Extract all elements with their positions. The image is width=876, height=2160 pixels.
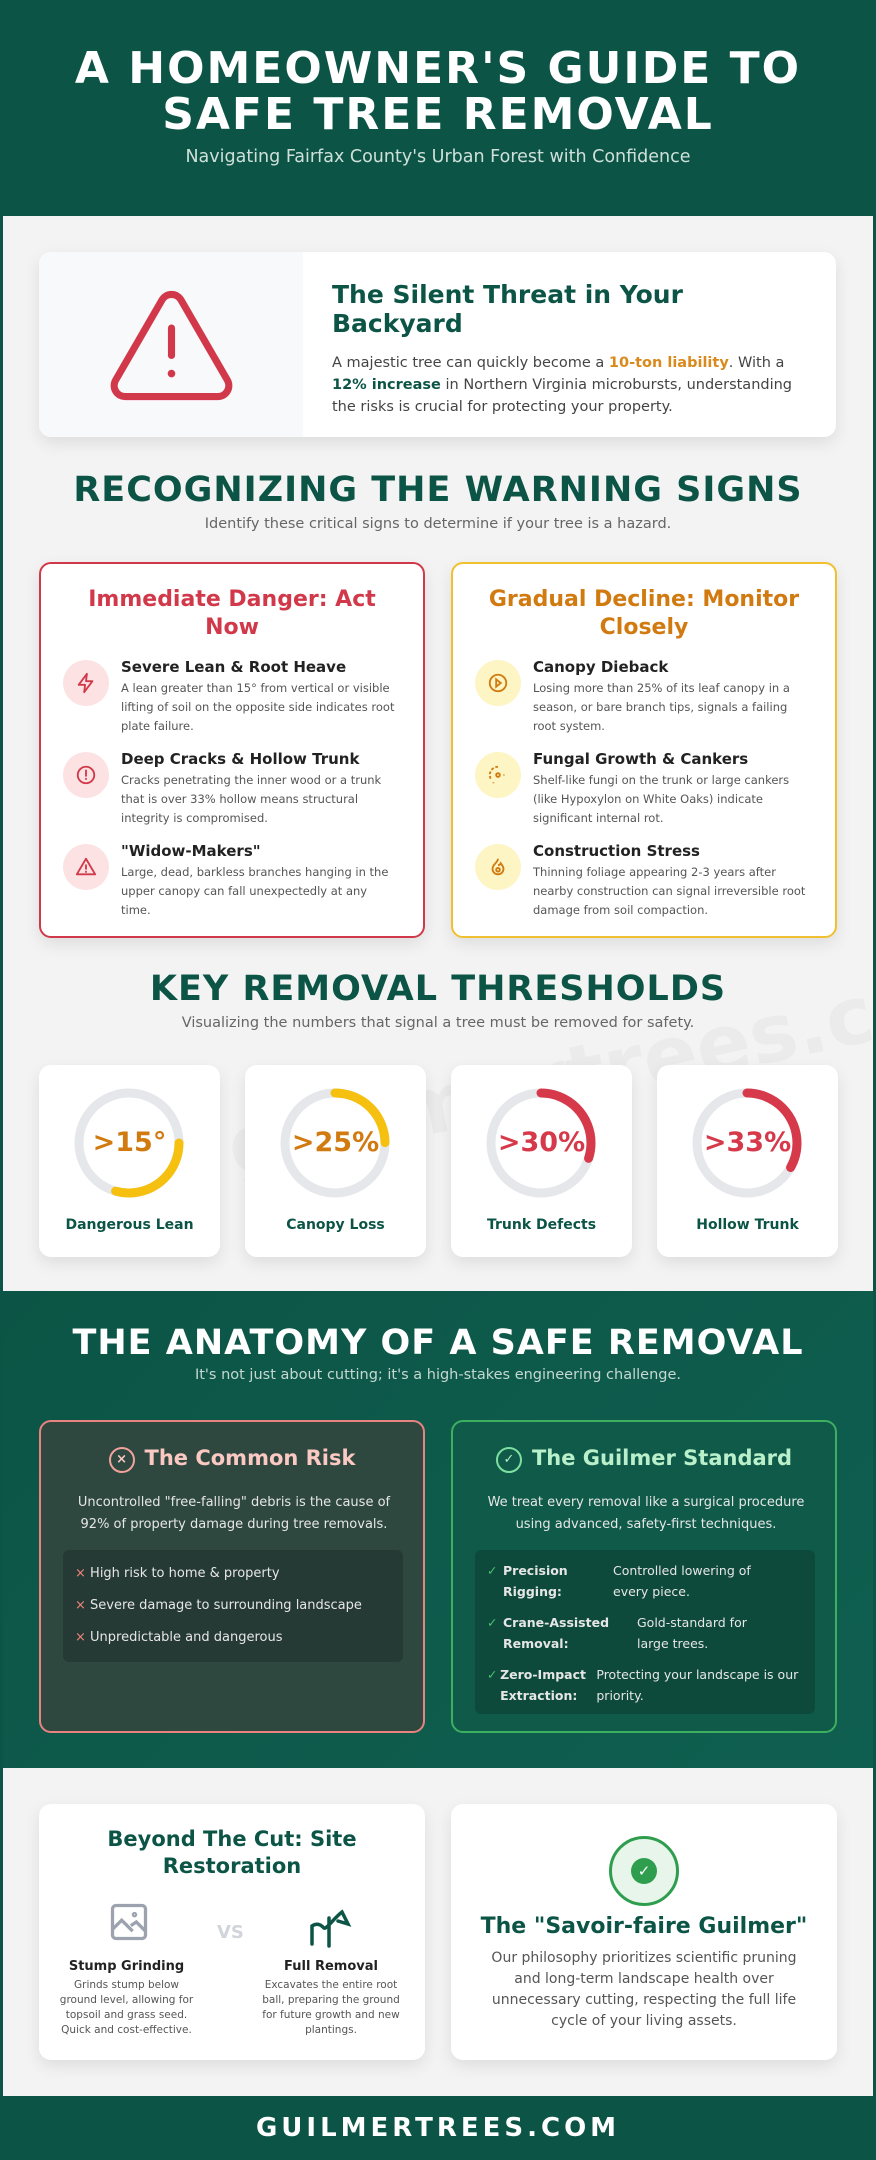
standard list	[475, 1550, 815, 1714]
gauge: hollow trunk: >33%	[704, 1127, 791, 1158]
icon: check badge: ✓	[638, 1862, 650, 1880]
standard list: ✓	[487, 1615, 497, 1630]
gauge: hollow trunk: Hollow Trunk	[696, 1217, 799, 1233]
header	[0, 0, 876, 216]
heading: thresholds: KEY REMOVAL THRESHOLDS	[150, 969, 726, 1009]
footer: GUILMERTREES.COM	[256, 2113, 620, 2143]
gauge: lean: Dangerous Lean	[65, 1217, 194, 1233]
panel: savoir-faire: The "Savoir-faire Guilmer"	[481, 1914, 807, 1939]
subheading: It's not just about cutting; it's a high-stakes engineering challenge.	[195, 1367, 681, 1383]
item: construction stress: Construction Stress	[533, 842, 700, 860]
standard list: Zero-Impact Extraction:	[500, 1667, 586, 1703]
icon: check badge	[609, 1836, 679, 1906]
panel: immediate danger	[39, 562, 425, 938]
gauge: lean: >15°	[93, 1127, 166, 1158]
panel: gradual decline: Gradual Decline: Monitor	[489, 587, 799, 612]
item: widow-makers: "Widow-Makers"	[121, 842, 261, 860]
icon: stump grinding	[110, 1904, 148, 1940]
threat text: The Silent Threat in Your Backyard	[332, 280, 683, 338]
item: deep cracks	[63, 750, 381, 825]
item: widow-makers	[63, 842, 388, 917]
panel: guilmer standard: We treat every removal like a surgical procedure using advanced, safety-first techniques.	[488, 1495, 804, 1532]
dark section: anatomy	[3, 1291, 873, 1768]
full removal text: Full Removal	[284, 1959, 378, 1974]
heading: warning signs: RECOGNIZING THE WARNING SIGNS	[73, 470, 803, 510]
item: deep cracks: Cracks penetrating the inner wood or a trunk that is over 33% hollow means structural integrity is compromised.	[121, 773, 381, 825]
panel: guilmer standard	[451, 1420, 837, 1733]
panel: silent threat	[39, 252, 836, 437]
title: A HOMEOWNER'S GUIDE TO	[75, 43, 801, 94]
standard list: Controlled lowering of every piece.	[613, 1563, 751, 1599]
threat text	[332, 280, 792, 415]
item: canopy dieback: Canopy Dieback	[533, 658, 668, 676]
panel: site restoration	[39, 1804, 425, 2060]
full removal text: Excavates the entire root ball, preparing the ground for future growth and new plantings.	[262, 1979, 400, 2036]
standard list: Precision Rigging:	[503, 1563, 568, 1599]
panel: site restoration: VS	[217, 1922, 244, 1943]
panel: site restoration: Beyond The Cut: Site	[107, 1827, 357, 1851]
item: severe lean	[63, 658, 394, 733]
gauge: trunk defects	[451, 1065, 632, 1257]
gauge: canopy: >25%	[292, 1127, 379, 1158]
standard list: Crane-Assisted Removal:	[503, 1615, 609, 1651]
footer	[0, 2096, 876, 2160]
item: severe lean: Severe Lean & Root Heave	[121, 658, 346, 676]
item: deep cracks: Deep Cracks & Hollow Trunk	[121, 750, 359, 768]
gauge: canopy: Canopy Loss	[286, 1217, 385, 1233]
light section 1	[3, 216, 873, 1291]
subheading: Identify these critical signs to determine if your tree is a hazard.	[205, 516, 671, 532]
panel: guilmer standard: The Guilmer Standard	[532, 1446, 792, 1470]
subtitle: Navigating Fairfax County's Urban Forest with Confidence	[185, 147, 691, 167]
light section 2	[3, 1768, 873, 2096]
icon: full removal	[310, 1909, 352, 1948]
gauge: trunk defects: Trunk Defects	[487, 1217, 596, 1233]
item: fungal growth	[475, 750, 789, 825]
panel: savoir-faire: Our philosophy prioritizes scientific pruning and long-term landscape health over unnecessary cutting, respecting the full life cycle of your living assets.	[491, 1950, 797, 2029]
title: SAFE TREE REMOVAL	[162, 89, 714, 140]
item: canopy dieback	[475, 658, 790, 733]
standard list: Protecting your landscape is our priority.	[596, 1667, 798, 1703]
gauge: trunk defects: >30%	[498, 1127, 585, 1158]
stump grinding text: Stump Grinding	[69, 1959, 184, 1974]
heading: THE ANATOMY OF A SAFE REMOVAL	[72, 1323, 804, 1363]
risk list	[63, 1550, 403, 1662]
risk list: × Unpredictable and dangerous	[75, 1630, 282, 1645]
icon: warning triangle	[39, 252, 303, 437]
standard list: Gold-standard for large trees.	[637, 1615, 747, 1651]
threat text: A majestic tree can quickly become a 10-ton liability. With a 12% increase in Northern Virginia microbursts, understanding the risks is crucial for protecting your property.	[332, 355, 792, 415]
panel: immediate danger: Now	[205, 615, 259, 640]
panel: gradual decline: Closely	[600, 615, 688, 640]
panel: immediate danger: Immediate Danger: Act	[88, 587, 376, 612]
panel: gradual decline	[451, 562, 837, 938]
gauge: hollow trunk	[657, 1065, 838, 1257]
item: severe lean: A lean greater than 15° from vertical or visible lifting of soil on the opposite side indicates root plate failure.	[121, 681, 394, 733]
panel: common risk: Uncontrolled "free-falling" debris is the cause of 92% of property damage during tree removals.	[78, 1495, 390, 1532]
title	[75, 43, 801, 140]
panel: common risk	[39, 1420, 425, 1733]
item: fungal growth: Fungal Growth & Cankers	[533, 750, 748, 768]
subheading: Visualizing the numbers that signal a tree must be removed for safety.	[182, 1015, 694, 1031]
item: construction stress: Thinning foliage appearing 2-3 years after nearby construction can signal irreversible root damage from soil compaction.	[533, 865, 805, 917]
risk list: × High risk to home & property	[75, 1566, 280, 1581]
risk list: × Severe damage to surrounding landscape	[75, 1598, 362, 1613]
item: fungal growth: Shelf-like fungi on the trunk or large cankers (like Hypoxylon on White Oaks) indicate significant internal rot.	[533, 773, 789, 825]
stump grinding text: Grinds stump below ground level, allowing for topsoil and grass seed. Quick and cost-effective.	[60, 1979, 193, 2036]
panel: savoir-faire	[451, 1804, 837, 2060]
item: widow-makers: Large, dead, barkless branches hanging in the upper canopy can fall unexpectedly at any time.	[121, 865, 388, 917]
item: construction stress	[475, 842, 806, 917]
risk heading: The Common Risk	[145, 1446, 355, 1470]
standard list: ✓	[487, 1563, 497, 1578]
item: canopy dieback: Losing more than 25% of its leaf canopy in a season, or bare branch tips, signals a failing root system.	[533, 681, 790, 733]
panel: site restoration: Restoration	[163, 1854, 301, 1878]
standard list: ✓	[487, 1667, 497, 1682]
gauge: lean	[39, 1065, 220, 1257]
gauge: canopy	[245, 1065, 426, 1257]
panel: guilmer standard: ✓	[504, 1452, 514, 1467]
risk heading: ×	[116, 1452, 127, 1467]
